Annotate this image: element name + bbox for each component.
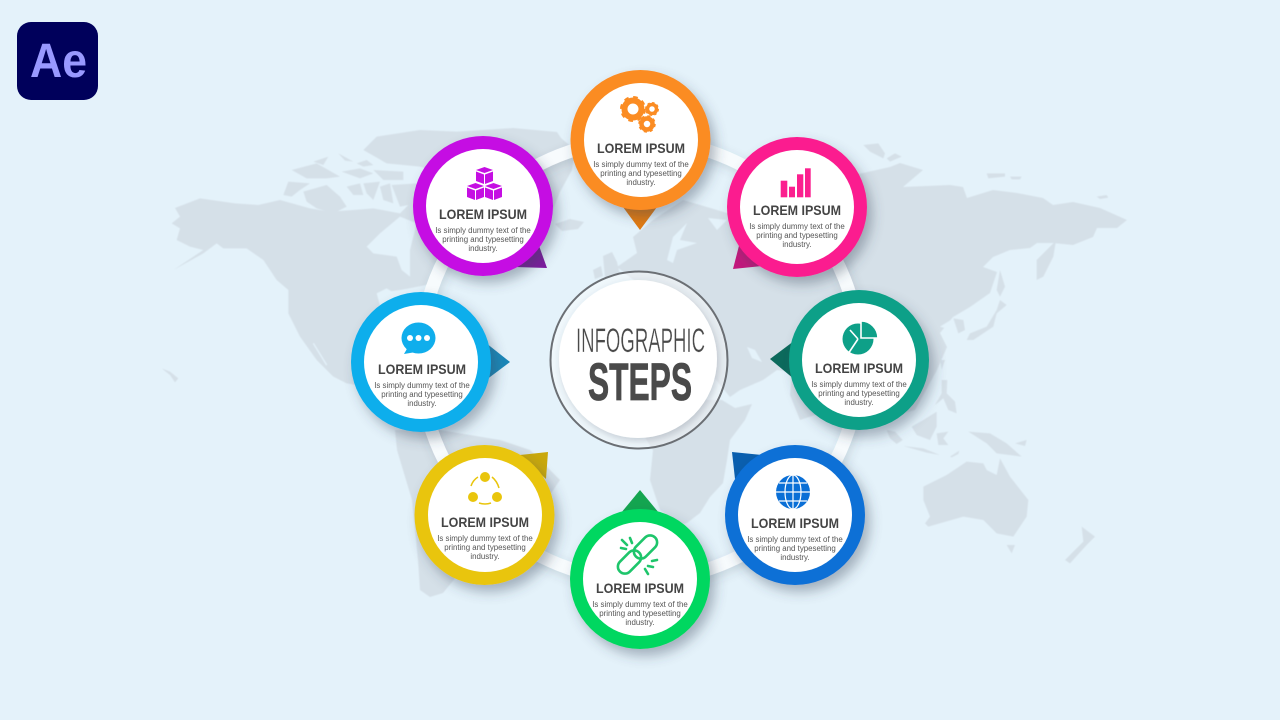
pointer: [486, 343, 510, 380]
icon: gears: [622, 98, 658, 132]
text: [374, 361, 470, 408]
map: Oceania and South East Asia: [887, 360, 1095, 563]
text: [592, 580, 688, 627]
map: North America and Arctic islands: [162, 128, 575, 387]
text: LOREM IPSUM: [753, 202, 841, 218]
text: [749, 202, 845, 249]
text: [593, 140, 689, 187]
disc: [570, 70, 710, 210]
centre badge: [550, 272, 728, 448]
pointer: [732, 452, 762, 479]
map: Far East islands: [863, 143, 1108, 340]
step: cyan chat: [351, 292, 510, 432]
text: LOREM IPSUM: [439, 206, 527, 222]
icon: broken chain link: [615, 533, 660, 576]
text: industry.: [468, 244, 498, 253]
disc: [414, 445, 554, 585]
text: printing and typesetting: [442, 235, 524, 244]
disc: [725, 445, 865, 585]
map: Iceland: [555, 219, 584, 231]
text: Is simply dummy text of the: [592, 600, 688, 609]
disc: [727, 137, 867, 277]
centre title: [576, 322, 705, 412]
world map: [162, 128, 1127, 597]
step: teal pie: [770, 290, 929, 430]
text: industry.: [407, 399, 437, 408]
text: industry.: [626, 178, 656, 187]
icon: cubes: [467, 167, 502, 200]
disc: [570, 509, 710, 649]
Adobe After Effects logo: Ae: [30, 35, 87, 88]
connecting ring: [420, 140, 860, 580]
icon: globe: [776, 475, 810, 509]
text: [747, 515, 843, 562]
disc: [413, 136, 553, 276]
step: yellow share: [414, 445, 554, 585]
icon: share network: [468, 472, 502, 504]
text: LOREM IPSUM: [441, 514, 529, 530]
text: printing and typesetting: [756, 231, 838, 240]
map: British Isles: [593, 252, 620, 279]
pointer: [770, 341, 794, 379]
text: LOREM IPSUM: [597, 140, 685, 156]
step: blue globe: [725, 445, 865, 585]
text: [437, 514, 533, 561]
text: printing and typesetting: [444, 543, 526, 552]
text: printing and typesetting: [754, 544, 836, 553]
text: LOREM IPSUM: [378, 361, 466, 377]
centre title: STEPS: [588, 353, 692, 412]
icon: bars: [781, 168, 811, 197]
disc: [789, 290, 929, 430]
pointer: [515, 243, 547, 268]
map: Eurasia: [617, 163, 1127, 420]
icon: chat bubble: [402, 322, 436, 354]
text: [811, 360, 907, 407]
text: LOREM IPSUM: [751, 515, 839, 531]
text: printing and typesetting: [381, 390, 463, 399]
text: LOREM IPSUM: [815, 360, 903, 376]
pointer: [621, 490, 659, 513]
centre title: INFOGRAPHIC: [576, 322, 705, 360]
text: printing and typesetting: [600, 169, 682, 178]
text: Is simply dummy text of the: [374, 381, 470, 390]
pointer: [733, 238, 762, 269]
text: [435, 206, 531, 253]
icon: pie chart: [842, 321, 878, 354]
text: industry.: [780, 553, 810, 562]
disc: [351, 292, 491, 432]
text: LOREM IPSUM: [596, 580, 684, 596]
text: Is simply dummy text of the: [747, 535, 843, 544]
centre outer ring: [550, 272, 728, 448]
text: Is simply dummy text of the: [811, 380, 907, 389]
text: industry.: [625, 618, 655, 627]
text: Is simply dummy text of the: [435, 226, 531, 235]
step: green link: [570, 490, 710, 649]
map: Africa: [640, 400, 752, 525]
pointer: [623, 207, 657, 230]
map: South America: [395, 430, 560, 597]
text: Is simply dummy text of the: [749, 222, 845, 231]
text: industry.: [470, 552, 500, 561]
text: industry.: [844, 398, 874, 407]
text: printing and typesetting: [818, 389, 900, 398]
text: Is simply dummy text of the: [437, 534, 533, 543]
step: purple cubes: [413, 136, 553, 276]
Adobe After Effects logo: [17, 22, 98, 100]
text: industry.: [782, 240, 812, 249]
text: printing and typesetting: [599, 609, 681, 618]
step: orange gears: [570, 70, 710, 230]
pointer: [520, 452, 548, 479]
text: Is simply dummy text of the: [593, 160, 689, 169]
step: pink bars: [727, 137, 867, 277]
centre disc: [559, 280, 717, 438]
